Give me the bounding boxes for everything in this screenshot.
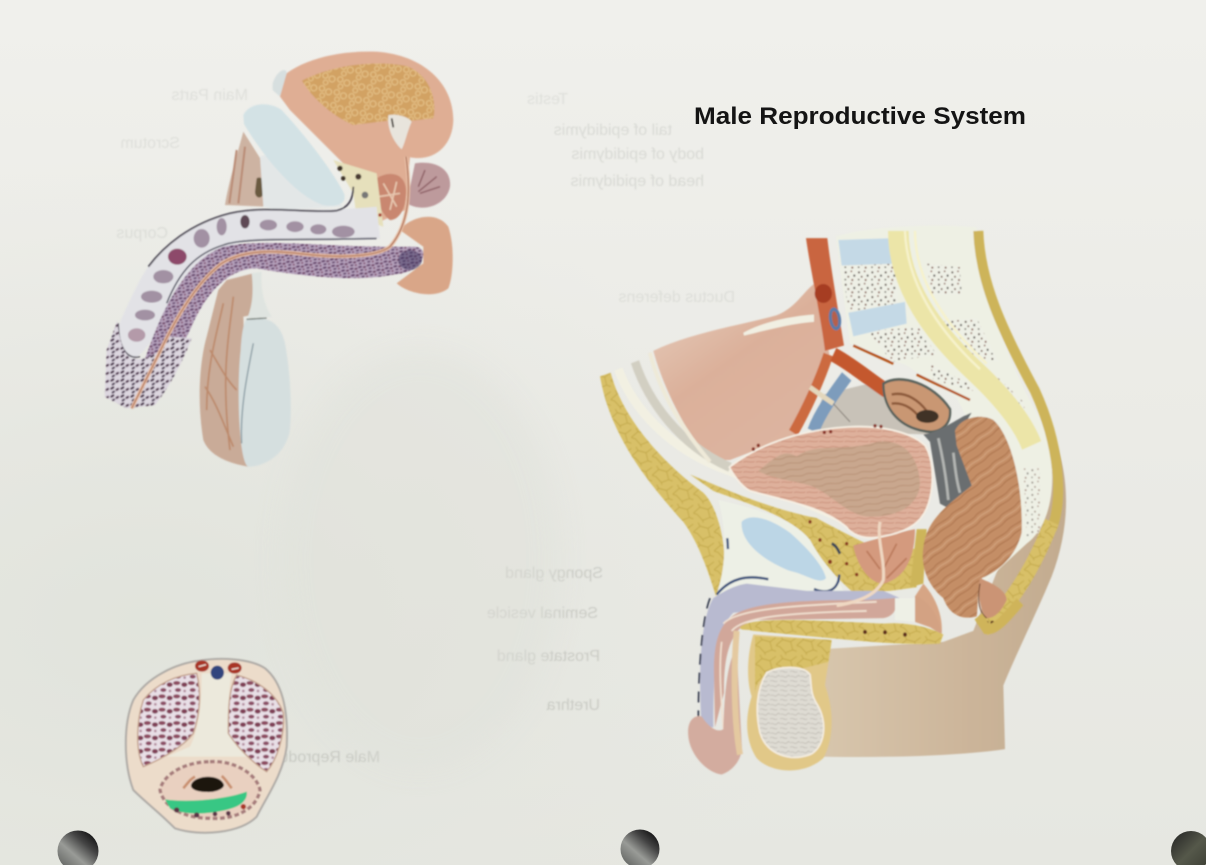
pubic symphysis xyxy=(742,517,826,581)
sacrum vessels xyxy=(853,345,970,400)
dark upper border xyxy=(167,238,377,303)
ghost labels bottom: Spongy gland xyxy=(505,565,603,582)
highlighted band xyxy=(165,792,247,813)
scrotum xyxy=(747,635,832,770)
posterior mass xyxy=(397,217,453,294)
septal blotches xyxy=(128,215,355,342)
testis xyxy=(239,318,291,467)
abdominal cavity xyxy=(653,282,830,460)
aorta xyxy=(806,238,844,351)
inferior fat band xyxy=(740,620,943,644)
bladder wall xyxy=(729,427,932,538)
penile shaft xyxy=(700,584,900,727)
bleed-through text from reverse page xyxy=(116,87,735,766)
anterior abdominal wall layers xyxy=(600,373,724,596)
urethra xyxy=(132,157,408,408)
bulb tissue xyxy=(895,598,915,622)
corpus cavernosum xyxy=(118,207,380,359)
pubis field xyxy=(717,500,843,595)
left corpus xyxy=(138,673,200,767)
ghost labels bottom xyxy=(189,565,603,766)
spermatic cord xyxy=(225,132,267,207)
bladder lumen xyxy=(302,63,434,147)
bladder outer wall xyxy=(273,52,453,223)
pubic symphysis xyxy=(243,104,345,206)
periprostatic fat xyxy=(333,160,383,227)
sigmoid colon xyxy=(883,379,950,432)
glans xyxy=(688,649,742,775)
prostate xyxy=(376,174,406,220)
hole middle xyxy=(620,830,660,865)
rectovesical pouch xyxy=(923,413,973,507)
ghost labels top: body of epididymis xyxy=(571,146,704,163)
glans xyxy=(105,321,192,408)
body skin xyxy=(810,435,1066,757)
vertebrae xyxy=(842,264,898,311)
prostate xyxy=(853,529,915,584)
ghost labels bottom: Seminal vesicle xyxy=(487,605,598,622)
discs xyxy=(838,238,895,265)
central septum xyxy=(167,673,247,757)
bladder lumen xyxy=(758,441,920,517)
grey peritoneal space xyxy=(810,380,930,435)
scrotal tissue xyxy=(200,273,260,467)
ghost labels top: Ductus deferens xyxy=(618,289,735,306)
ghost labels top xyxy=(116,87,735,306)
ghost labels bottom: Urethra xyxy=(547,697,600,714)
ghost labels top: tail of epididymis xyxy=(554,122,672,139)
faint reverse-page shadow xyxy=(280,350,560,770)
ghost labels top: Scrotum xyxy=(120,135,180,152)
ghost labels top: Corpus xyxy=(116,225,168,242)
ghost labels bottom: Male Reproductive System xyxy=(189,749,380,766)
ghost labels top: Testis xyxy=(527,91,568,108)
hole right xyxy=(1171,831,1206,865)
spine white field xyxy=(836,226,1052,584)
figure: sagittal section xyxy=(600,226,1066,775)
spongiosum ring xyxy=(160,762,260,819)
prevesical fat band xyxy=(690,475,920,593)
ghost labels top: head of epididymis xyxy=(571,173,704,190)
fat dots xyxy=(808,520,858,576)
urethral lumen xyxy=(191,777,224,792)
corpus spongiosum xyxy=(133,243,423,407)
outer spine fat xyxy=(978,231,1058,529)
cord to testis xyxy=(247,272,272,320)
anal canal xyxy=(915,584,942,635)
dorsal vessels xyxy=(195,660,209,672)
right corpus xyxy=(228,675,284,772)
seminal / right lobe xyxy=(407,163,450,208)
punched holes xyxy=(58,830,1206,865)
spinal canal xyxy=(898,231,1032,445)
testis xyxy=(757,667,824,757)
iliac vessels xyxy=(793,355,828,433)
figure: longitudinal section xyxy=(105,52,453,467)
hole left xyxy=(58,830,98,865)
figure: cross section xyxy=(126,659,287,833)
ghost labels bottom: Prostate gland xyxy=(497,648,600,665)
outer tissue xyxy=(126,659,287,833)
symphysis lower pale xyxy=(260,150,343,210)
title: Male Reproductive System xyxy=(694,103,1026,130)
rectum xyxy=(923,417,1022,618)
ghost labels top: Main Parts xyxy=(172,87,248,104)
